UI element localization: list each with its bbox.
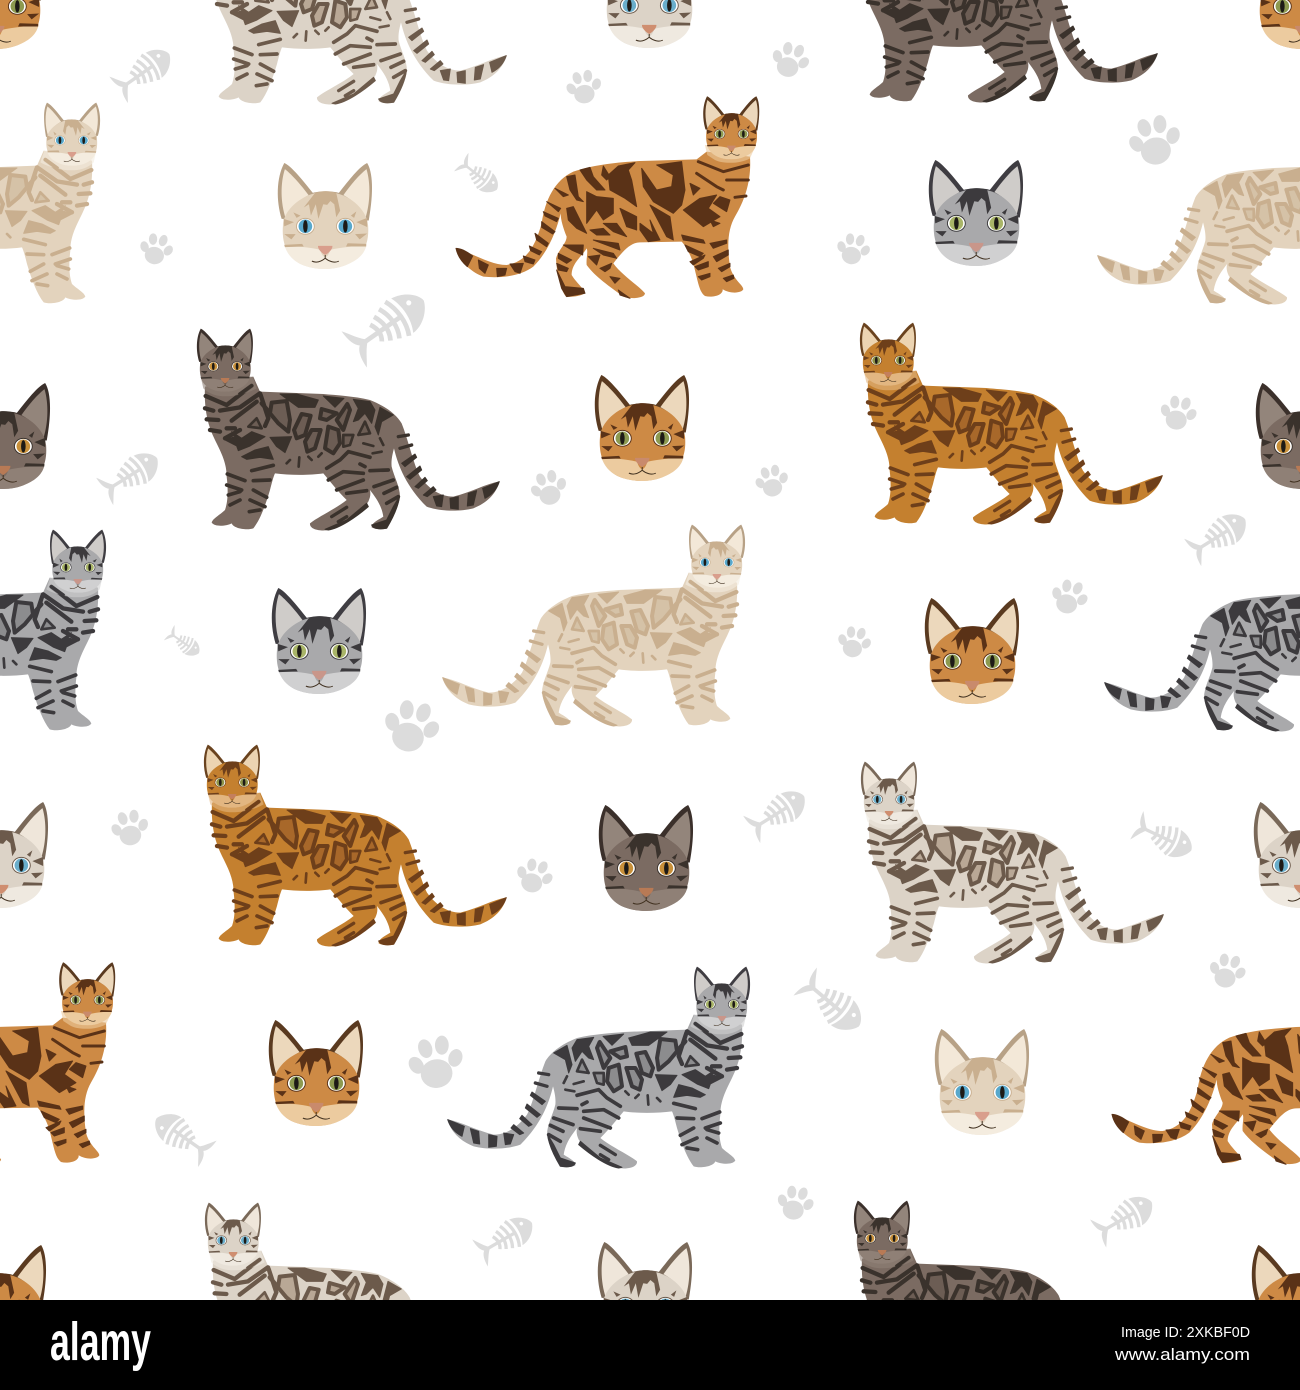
footer bar — [0, 1300, 1300, 1390]
icon: fish bone — [164, 625, 204, 661]
cat head: orange — [595, 375, 689, 481]
cat head: orange top right — [1255, 0, 1300, 49]
icon: fish bone — [342, 283, 436, 367]
cat head: dark — [599, 805, 693, 911]
icon: paw — [1046, 575, 1093, 618]
icon: fish bone — [147, 1105, 217, 1167]
cat: dark top — [855, 0, 1157, 102]
icon: fish bone — [96, 445, 166, 505]
cat: dark facing left — [197, 329, 499, 530]
cat: orange centre top — [456, 96, 759, 298]
cat: snow bottom — [205, 1203, 507, 1390]
cat head: orange — [925, 598, 1019, 704]
cat head: silver — [272, 588, 366, 694]
cat: tawny left — [204, 745, 506, 946]
cat head: cream — [935, 1029, 1029, 1135]
icon: paw — [1156, 392, 1201, 433]
icon: paw — [834, 623, 875, 660]
icon: fish bone — [1090, 1189, 1160, 1247]
cat head: cream — [278, 163, 372, 269]
cat head: silver — [929, 160, 1023, 266]
icon: paw — [833, 230, 874, 267]
cat: cream right edge — [1098, 103, 1300, 304]
cat head: orange top left — [0, 0, 44, 49]
icon: fish bone — [109, 41, 179, 103]
icon: paw — [402, 1031, 470, 1093]
logo: alamy: alamy — [50, 1312, 151, 1372]
icon: paw — [1122, 110, 1188, 170]
icon: fish bone — [743, 783, 813, 843]
cat head: orange bottom right — [1252, 1245, 1300, 1351]
icon: paw — [1205, 950, 1251, 992]
cat: silver left edge — [0, 530, 106, 731]
cat: orange left edge — [0, 962, 115, 1164]
cat: cream centre — [443, 525, 745, 726]
cat: silver right edge — [1105, 530, 1300, 731]
cat head: snow top — [602, 0, 696, 48]
cat head: dark left edge — [0, 383, 50, 489]
icon: fish bone — [1184, 506, 1254, 566]
icon: paw — [773, 1182, 818, 1223]
image id: Image ID: 2XKBF0D — [1121, 1324, 1250, 1341]
cat head: dark right edge — [1256, 383, 1300, 489]
cat: cream left edge — [0, 103, 100, 304]
cat head: snow left edge — [0, 802, 48, 908]
icon: paw — [525, 466, 573, 509]
cat: snow right — [861, 762, 1163, 963]
icon: fish bone — [454, 153, 504, 199]
cat: dark bottom — [854, 1201, 1156, 1390]
website: www.alamy.com — [1114, 1345, 1250, 1364]
cat head: snow bottom — [598, 1242, 692, 1348]
cat: snow top — [204, 0, 506, 104]
icon: fish bone — [472, 1209, 540, 1267]
cat: tawny right — [860, 323, 1162, 524]
cat head: snow right edge — [1254, 802, 1300, 908]
icon: paw — [377, 694, 447, 758]
icon: fish bone — [1130, 811, 1198, 865]
icon: fish bone — [793, 968, 871, 1040]
icon: paw — [136, 230, 177, 267]
icon: paw — [562, 67, 606, 106]
cat: orange right edge — [1112, 962, 1300, 1164]
cat: silver lower centre — [448, 967, 750, 1168]
cat head: orange — [269, 1020, 363, 1126]
icon: paw — [766, 37, 815, 82]
cat head: orange bottom left — [0, 1245, 46, 1351]
icon: paw — [751, 462, 793, 500]
icon: paw — [107, 807, 153, 848]
icon: paw — [511, 854, 558, 897]
